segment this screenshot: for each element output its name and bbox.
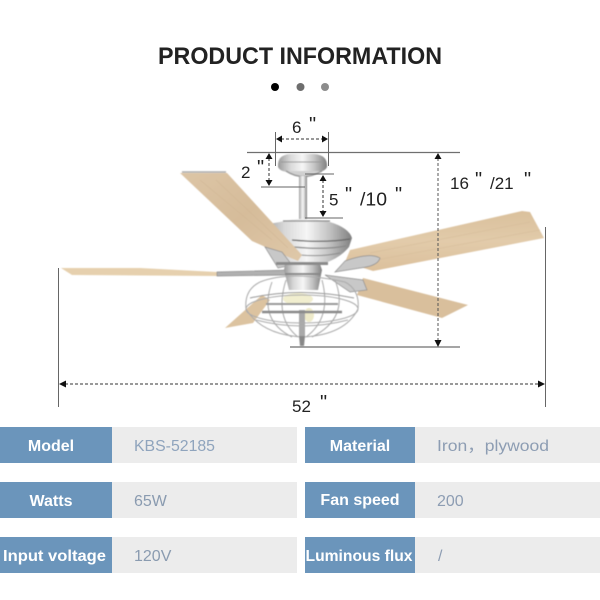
blade: far left <box>61 268 217 276</box>
spec row: Input voltage: Input voltage <box>3 548 106 565</box>
spec row: Luminous flux <box>305 537 600 573</box>
dimension: 5/10 inch downrod: 5 <box>329 190 338 210</box>
dimension: 16/21 inch overall height: 16 <box>450 174 469 193</box>
spec row: Fan speed: Fan speed <box>320 492 400 509</box>
spec row: Material <box>305 427 600 463</box>
title: PRODUCT INFORMATION <box>158 43 442 70</box>
dimension: 6 inch canopy width <box>276 114 328 166</box>
spec row: Material: Iron，plywood <box>437 438 549 455</box>
motor housing <box>262 219 352 263</box>
dimension: 5/10 inch downrod: " <box>395 184 402 206</box>
dimension: 16/21 inch overall height: /21 <box>490 174 514 193</box>
dimension: 2 inch canopy height: 2 <box>241 163 250 182</box>
downrod <box>299 176 307 219</box>
spec row: Material: Material <box>330 438 390 455</box>
dimension: 6 inch canopy width: 6 <box>292 118 301 137</box>
bulbs <box>283 293 314 336</box>
blade: lower right <box>357 278 468 318</box>
light kit housing <box>276 262 328 290</box>
dimension: 16/21 inch overall height: " <box>475 169 482 191</box>
spec row: Fan speed <box>305 482 600 518</box>
ceiling fan illustration <box>61 154 544 346</box>
dimension: 16/21 inch overall height: " <box>524 169 531 191</box>
dimension: 5/10 inch downrod: /10 <box>360 190 387 210</box>
spec row: Fan speed: 200 <box>437 493 464 510</box>
blade: top left <box>180 172 302 261</box>
dimension: 5/10 inch downrod: " <box>345 184 352 206</box>
spec row: Luminous flux: / <box>438 548 443 565</box>
spec row: Luminous flux: Luminous flux <box>306 548 413 565</box>
spec row: Watts <box>0 482 297 518</box>
dimension: 6 inch canopy width: " <box>309 114 316 136</box>
dimension: 52 inch blade span: " <box>320 392 327 414</box>
blade brackets <box>217 247 380 292</box>
dimension: 5/10 inch downrod <box>305 174 402 218</box>
spec row: Model <box>0 427 297 463</box>
spec row: Model: Model <box>28 438 74 455</box>
spec row: Input voltage <box>0 537 297 573</box>
blade: lower left <box>225 295 270 328</box>
dimension: 52 inch blade span: 52 <box>292 397 311 416</box>
wire cage <box>246 276 358 337</box>
spec row: Watts: 65W <box>134 493 168 510</box>
dimension: 2 inch canopy height: " <box>257 157 264 179</box>
canopy <box>278 154 327 176</box>
spec row: Model: KBS-52185 <box>134 438 215 455</box>
dimension: ceiling and floor reference lines <box>247 152 460 347</box>
finial <box>299 336 305 346</box>
blade: right <box>345 211 544 271</box>
pagination dots <box>271 83 329 91</box>
spec row: Input voltage: 120V <box>134 548 172 565</box>
dimension: 16/21 inch overall height <box>434 153 531 347</box>
dimension: 52 inch blade span <box>58 227 546 416</box>
dimension: 2 inch canopy height <box>241 153 305 187</box>
spec row: Watts: Watts <box>30 493 73 510</box>
